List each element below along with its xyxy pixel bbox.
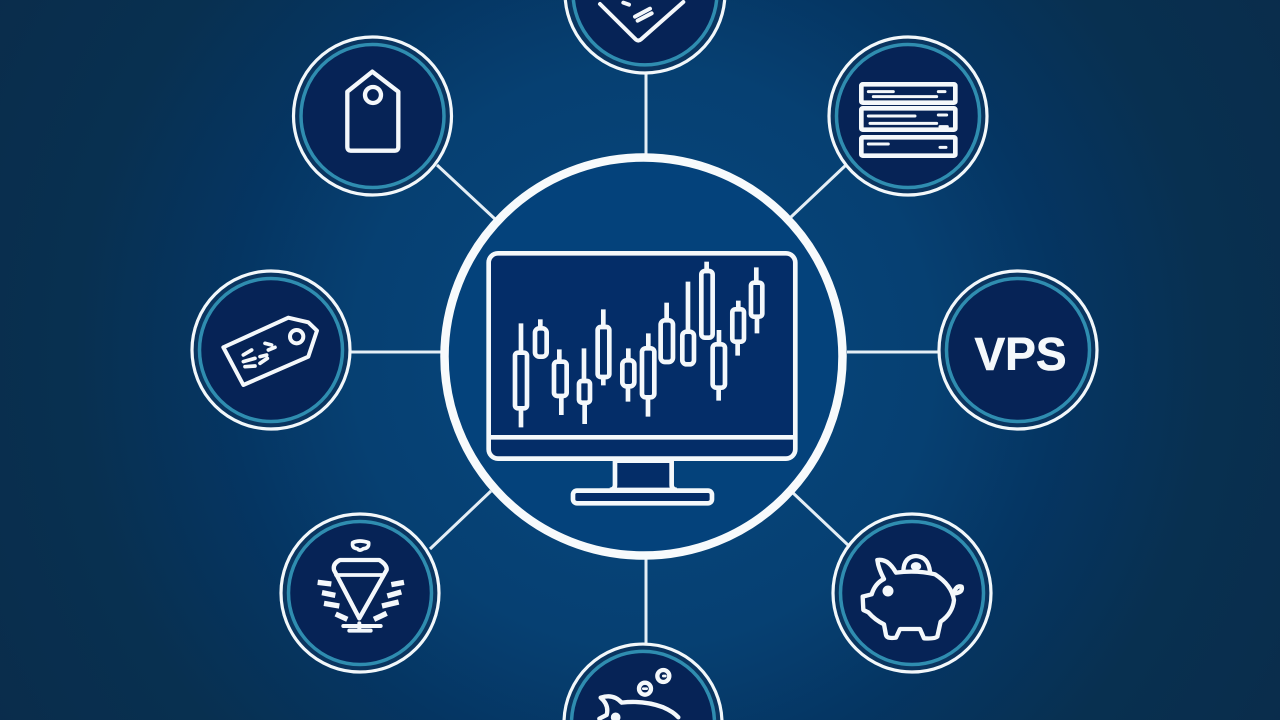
icon: piggy bank — [863, 556, 962, 638]
monitor stand — [610, 461, 677, 490]
connector lines — [351, 72, 938, 643]
node: bottom-left funnel — [281, 514, 439, 672]
node: top tag (cropped) — [565, 0, 725, 73]
icon: server stack — [861, 84, 955, 156]
icon: funnel with wings — [318, 541, 404, 631]
icon: price tag — [223, 318, 317, 385]
icon: monitor with candlestick chart — [489, 253, 795, 503]
icon: coins and piggy bank — [599, 670, 678, 720]
icon: diagonal price tag — [600, 2, 683, 40]
node: top-left tag — [294, 37, 452, 195]
monitor base — [573, 491, 712, 503]
icon: hanging tag — [347, 72, 398, 151]
candlesticks — [515, 262, 762, 427]
central hub circle — [444, 158, 842, 556]
node: bottom piggy bank (cropped) — [564, 644, 722, 720]
node: right VPS — [939, 271, 1097, 429]
label: VPS: VPS — [974, 328, 1067, 380]
node: bottom-right piggy bank — [833, 514, 991, 672]
node: left price tag — [192, 271, 350, 429]
monitor screen — [489, 253, 795, 459]
node: top-right servers — [829, 37, 987, 195]
